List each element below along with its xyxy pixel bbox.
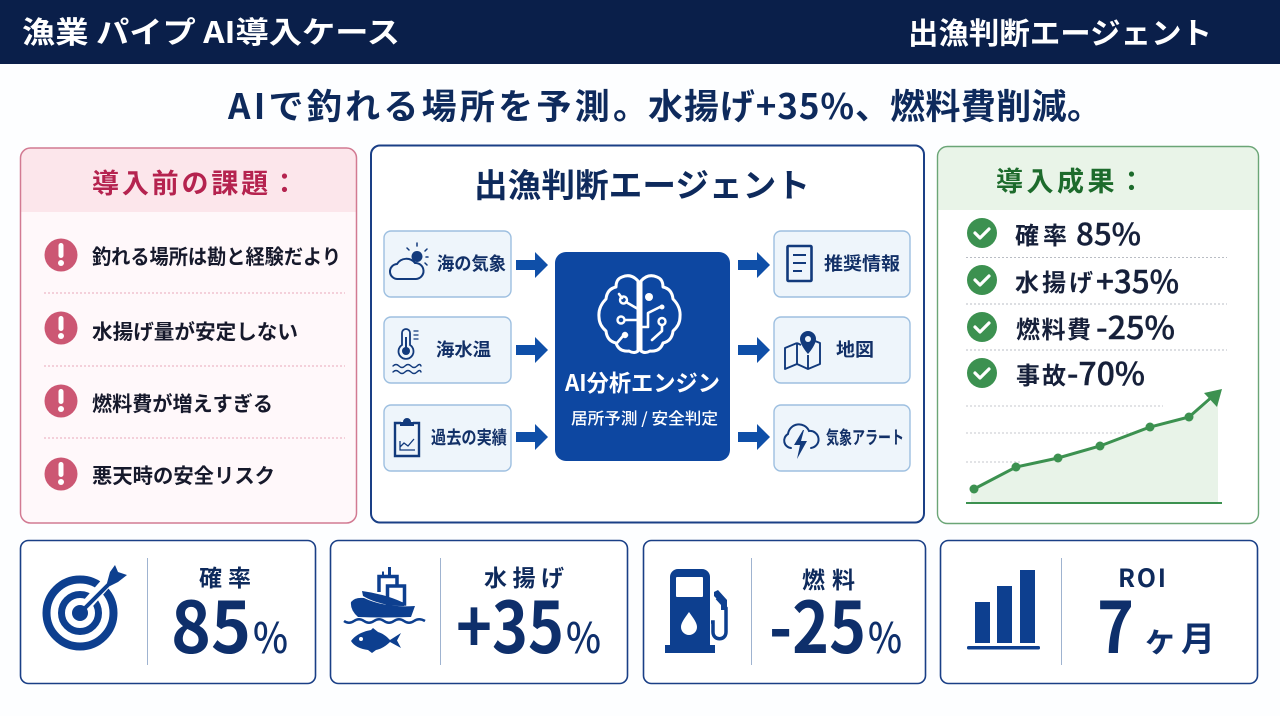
arrow: temperature to engine (516, 337, 548, 363)
KPI card: fuel (644, 540, 926, 684)
panel heading: agent: 出漁判断エージェント (474, 159, 810, 207)
arrow: weather to engine (516, 252, 548, 278)
KPI card: fuel: % (868, 605, 902, 666)
icon: bar chart (967, 570, 1040, 650)
KPI card: probability: 確率 (199, 559, 251, 593)
output: weather alert: 気象アラート (826, 424, 904, 450)
panel: results after adoption (938, 146, 1258, 524)
arrow: engine to recommendation (738, 252, 770, 278)
output: map: 地図 (836, 336, 874, 362)
icon: brain (599, 276, 680, 352)
KPI card: catch: 水揚げ (484, 559, 564, 593)
result: fuel (967, 303, 1175, 348)
arrow: records to engine (516, 424, 548, 450)
result: accidents (967, 349, 1145, 394)
header title: 漁業 パイプ AI導入ケース (22, 8, 400, 52)
result: probability (967, 210, 1141, 254)
KPI card: probability (20, 540, 316, 684)
arrow: engine to weather alert (738, 424, 770, 450)
KPI card: catch: % (566, 605, 601, 666)
result: fuel: -25% (1096, 303, 1175, 348)
result: fuel: 燃料費 (1016, 310, 1091, 345)
KPI card: fuel: -25 (769, 572, 866, 674)
KPI card: ROI: ROI (1118, 559, 1166, 595)
challenge item: unstable catch: 水揚げ量が安定しない (92, 315, 298, 345)
output: map (774, 317, 910, 383)
KPI card: probability: % (253, 605, 288, 666)
KPI card: ROI: 7 (1097, 572, 1134, 674)
result: probability: 確率 (1015, 216, 1067, 251)
output: recommendation (774, 231, 910, 297)
icon: target (46, 565, 127, 646)
headline: AIで釣れる場所を予測。 (227, 79, 648, 130)
panel heading: challenges: 導入前の課題： (92, 162, 298, 201)
header bar (0, 0, 1280, 64)
KPI card: probability: 85 (171, 572, 251, 674)
result: accidents: -70% (1067, 349, 1145, 394)
result: catch: +35% (1096, 257, 1179, 302)
header subtitle: 出漁判断エージェント (908, 9, 1212, 53)
headline (227, 79, 1102, 130)
line chart: upward trend (966, 389, 1222, 504)
panel heading: results: 導入成果： (996, 160, 1145, 199)
input: sea temperature: 海水温 (436, 336, 491, 362)
panel: challenges before adoption (20, 148, 356, 523)
challenge item: fuel cost: 燃料費が増えすぎる (92, 387, 273, 417)
KPI card: catch (330, 540, 628, 684)
headline: 燃料費削減。 (890, 79, 1102, 130)
output: recommendation: 推奨情報 (824, 250, 900, 276)
result: accidents: 事故 (1016, 356, 1066, 391)
KPI card: ROI: ヶ月 (1143, 612, 1215, 661)
KPI card: fuel: 燃料 (802, 561, 855, 595)
AI engine block: 居所予測 / 安全判定 (571, 405, 718, 429)
KPI card: catch: +35 (456, 572, 564, 674)
icon: fishing boat and fish (344, 567, 425, 653)
arrow: engine to map (738, 337, 770, 363)
input: sea weather (384, 231, 511, 297)
result: catch (967, 257, 1179, 302)
output: weather alert (774, 405, 910, 471)
AI engine block (555, 252, 730, 461)
result: catch: 水揚げ (1015, 263, 1093, 298)
input: past records: 過去の実績 (431, 424, 507, 450)
AI engine block: AI分析エンジン (564, 364, 720, 398)
input: past records (384, 405, 511, 471)
challenge item: safety risk: 悪天時の安全リスク (92, 459, 275, 489)
challenge item: fishing spots: 釣れる場所は勘と経験だより (92, 240, 341, 270)
input: sea weather: 海の気象 (437, 250, 506, 276)
input: sea temperature (384, 317, 511, 383)
headline: 水揚げ+35%、 (648, 79, 890, 130)
panel: agent flow diagram (371, 146, 924, 522)
result: probability: 85% (1076, 210, 1141, 254)
KPI card: ROI (940, 540, 1258, 684)
icon: fuel pump (665, 569, 727, 653)
